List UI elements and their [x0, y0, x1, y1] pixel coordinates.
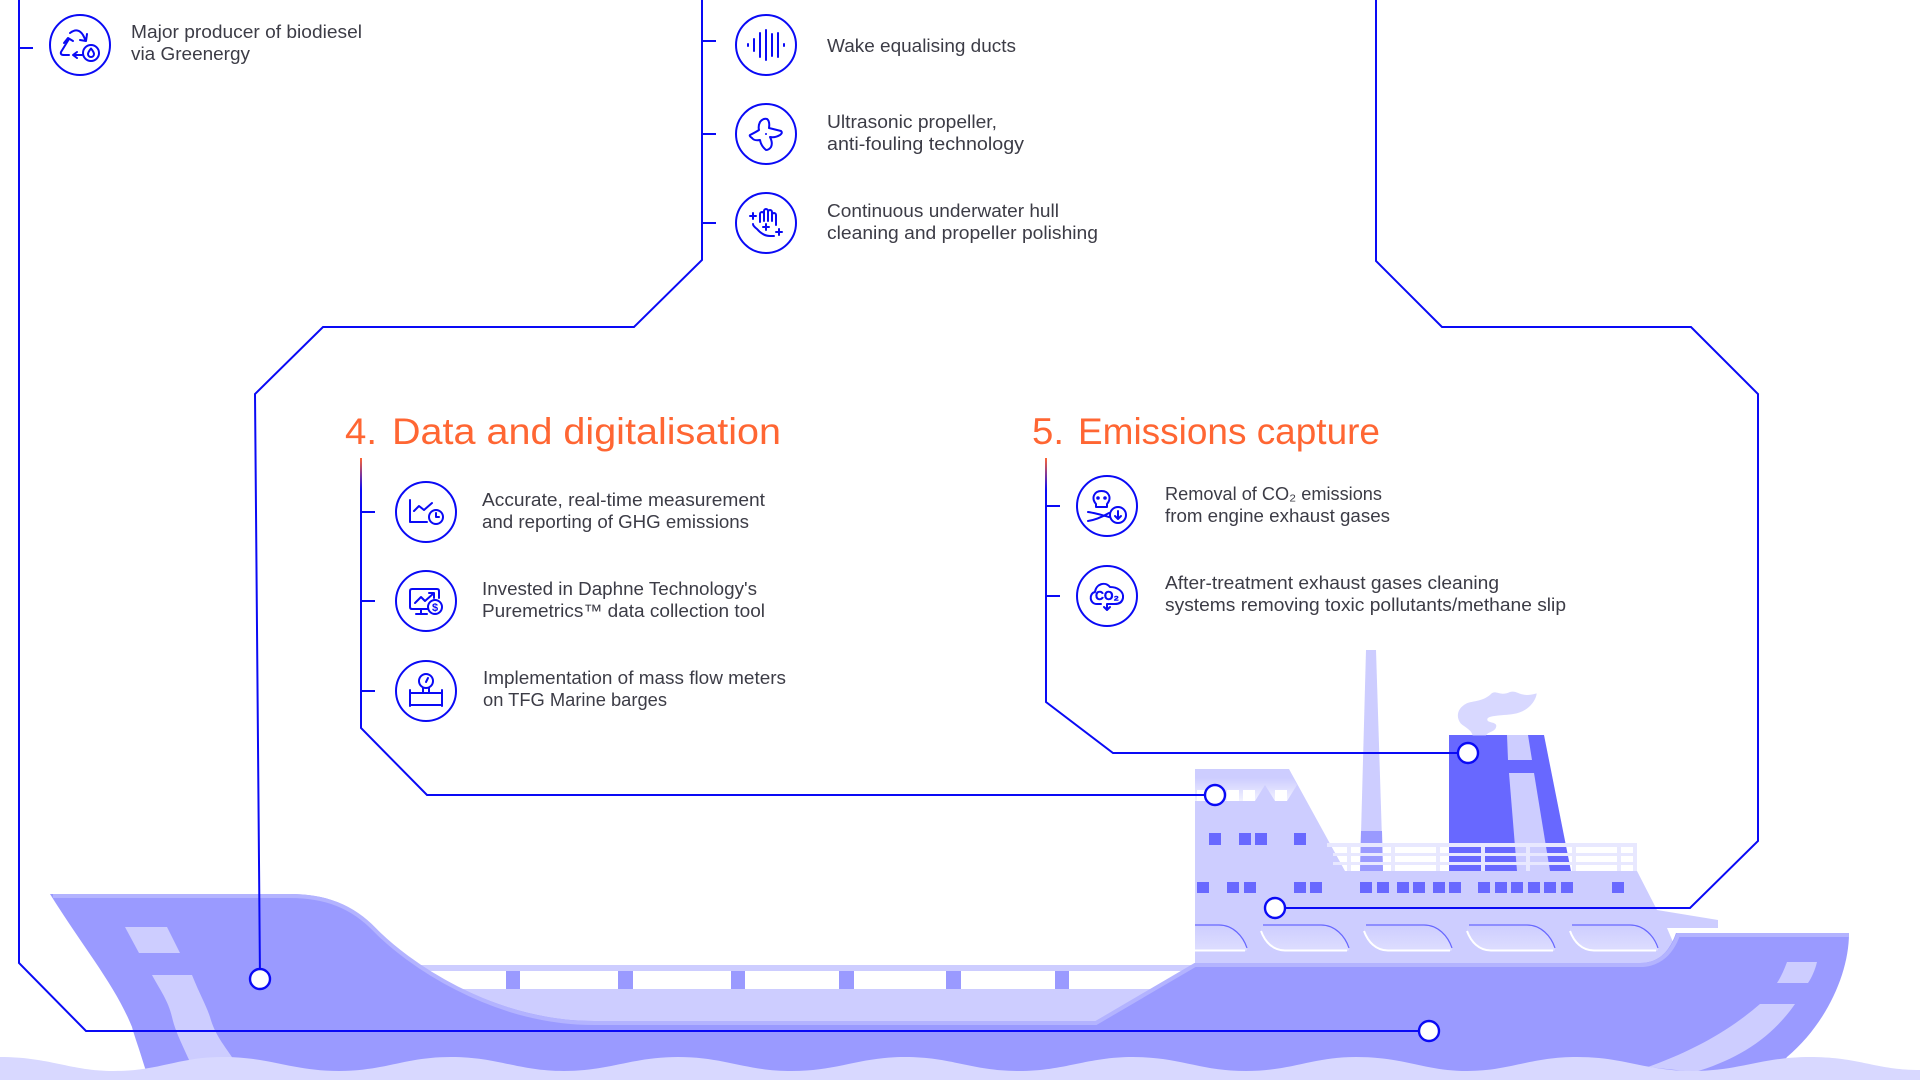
item text: [827, 112, 1024, 154]
heading: section 5: 5.: [1032, 411, 1064, 452]
item text: After-treatment exhaust gases cleaning: [1165, 573, 1499, 593]
marker: bow: [250, 969, 270, 989]
marker: hull: [1419, 1021, 1439, 1041]
item text: via Greenergy: [131, 44, 250, 64]
panel: emissions capture: [1032, 411, 1566, 626]
item text: [1165, 573, 1566, 615]
marker: funnel: [1458, 743, 1478, 763]
item text: on TFG Marine barges: [483, 690, 667, 710]
icon: CO2 cloud: [1077, 566, 1137, 626]
water waves: [0, 1057, 1920, 1080]
item text: [482, 579, 765, 621]
marker: bridge: [1205, 785, 1225, 805]
railing: [1327, 843, 1637, 871]
item text: Accurate, real-time measurement: [482, 490, 765, 510]
ship deck rail and posts: [410, 965, 1195, 1025]
connector line: section 4 to bridge marker: [361, 458, 1215, 795]
panel: data and digitalisation: [345, 411, 786, 721]
item text: Major producer of biodiesel: [131, 22, 362, 42]
icon: sound wave: [736, 15, 796, 75]
item text: Implementation of mass flow meters: [483, 668, 786, 688]
list item: mass flow meters: [361, 661, 786, 721]
icon: skull with down arrow: [1077, 476, 1137, 536]
item text: Puremetrics™ data collection tool: [482, 601, 765, 621]
item text: [482, 490, 765, 532]
icon: flow meter: [396, 661, 456, 721]
item text: [131, 22, 362, 64]
icon: hand with sparkles: [736, 193, 796, 253]
ship funnel: [1449, 735, 1571, 871]
item text: [1165, 484, 1390, 526]
connector line: section 1 to bow hull: [19, 0, 1429, 1031]
item text: anti-fouling technology: [827, 134, 1024, 154]
item text: systems removing toxic pollutants/methane slip: [1165, 595, 1566, 615]
marker: deck: [1265, 898, 1285, 918]
connector line: section 3 to deck marker: [1275, 0, 1758, 908]
item text: [483, 668, 786, 710]
heading: section 4: 4.: [345, 411, 377, 452]
item text: [827, 201, 1098, 243]
item text: Ultrasonic propeller,: [827, 112, 997, 132]
bridge glazing: [1195, 778, 1297, 801]
heading: section 4: Data and digitalisation: [392, 411, 781, 452]
lower windows: [1197, 882, 1624, 893]
icon: propeller: [736, 104, 796, 164]
item text: cleaning and propeller polishing: [827, 223, 1098, 243]
item text: Invested in Daphne Technology's: [482, 579, 757, 599]
heading: section 5: Emissions capture: [1078, 411, 1380, 452]
list item: hull cleaning: [702, 193, 1098, 253]
item text: Wake equalising ducts: [827, 36, 1016, 56]
connector line: section 2 to bow marker: [255, 0, 702, 979]
icon: monitor with dollar: [396, 571, 456, 631]
list item: wake equalising ducts: [702, 15, 1016, 75]
hull: [50, 894, 1849, 1080]
icon: CO2 cloud: CO₂: [1095, 589, 1119, 603]
icon: chart with clock: [396, 482, 456, 542]
item text: Removal of CO₂ emissions: [1165, 484, 1382, 504]
lifeboats: [1159, 925, 1658, 951]
list item: Puremetrics data tool: [361, 571, 765, 631]
item text: Continuous underwater hull: [827, 201, 1059, 221]
superstructure: [1195, 769, 1718, 970]
item text: from engine exhaust gases: [1165, 506, 1390, 526]
list item: biodiesel: [19, 15, 362, 75]
list item: ultrasonic propeller: [702, 104, 1024, 164]
connector line: section 5 to funnel marker: [1046, 458, 1468, 753]
list item: real-time measurement: [361, 482, 765, 542]
illustration: ship: [50, 650, 1849, 1080]
funnel smoke: [1458, 692, 1537, 735]
icon: monitor with dollar: $: [432, 602, 438, 614]
item text: and reporting of GHG emissions: [482, 512, 749, 532]
list item: after-treatment: [1046, 566, 1566, 626]
upper windows: [1209, 833, 1306, 845]
icon: recycling with fuel drop: [50, 15, 110, 75]
list item: CO2 removal: [1046, 476, 1390, 536]
ship mast: [1360, 650, 1383, 871]
